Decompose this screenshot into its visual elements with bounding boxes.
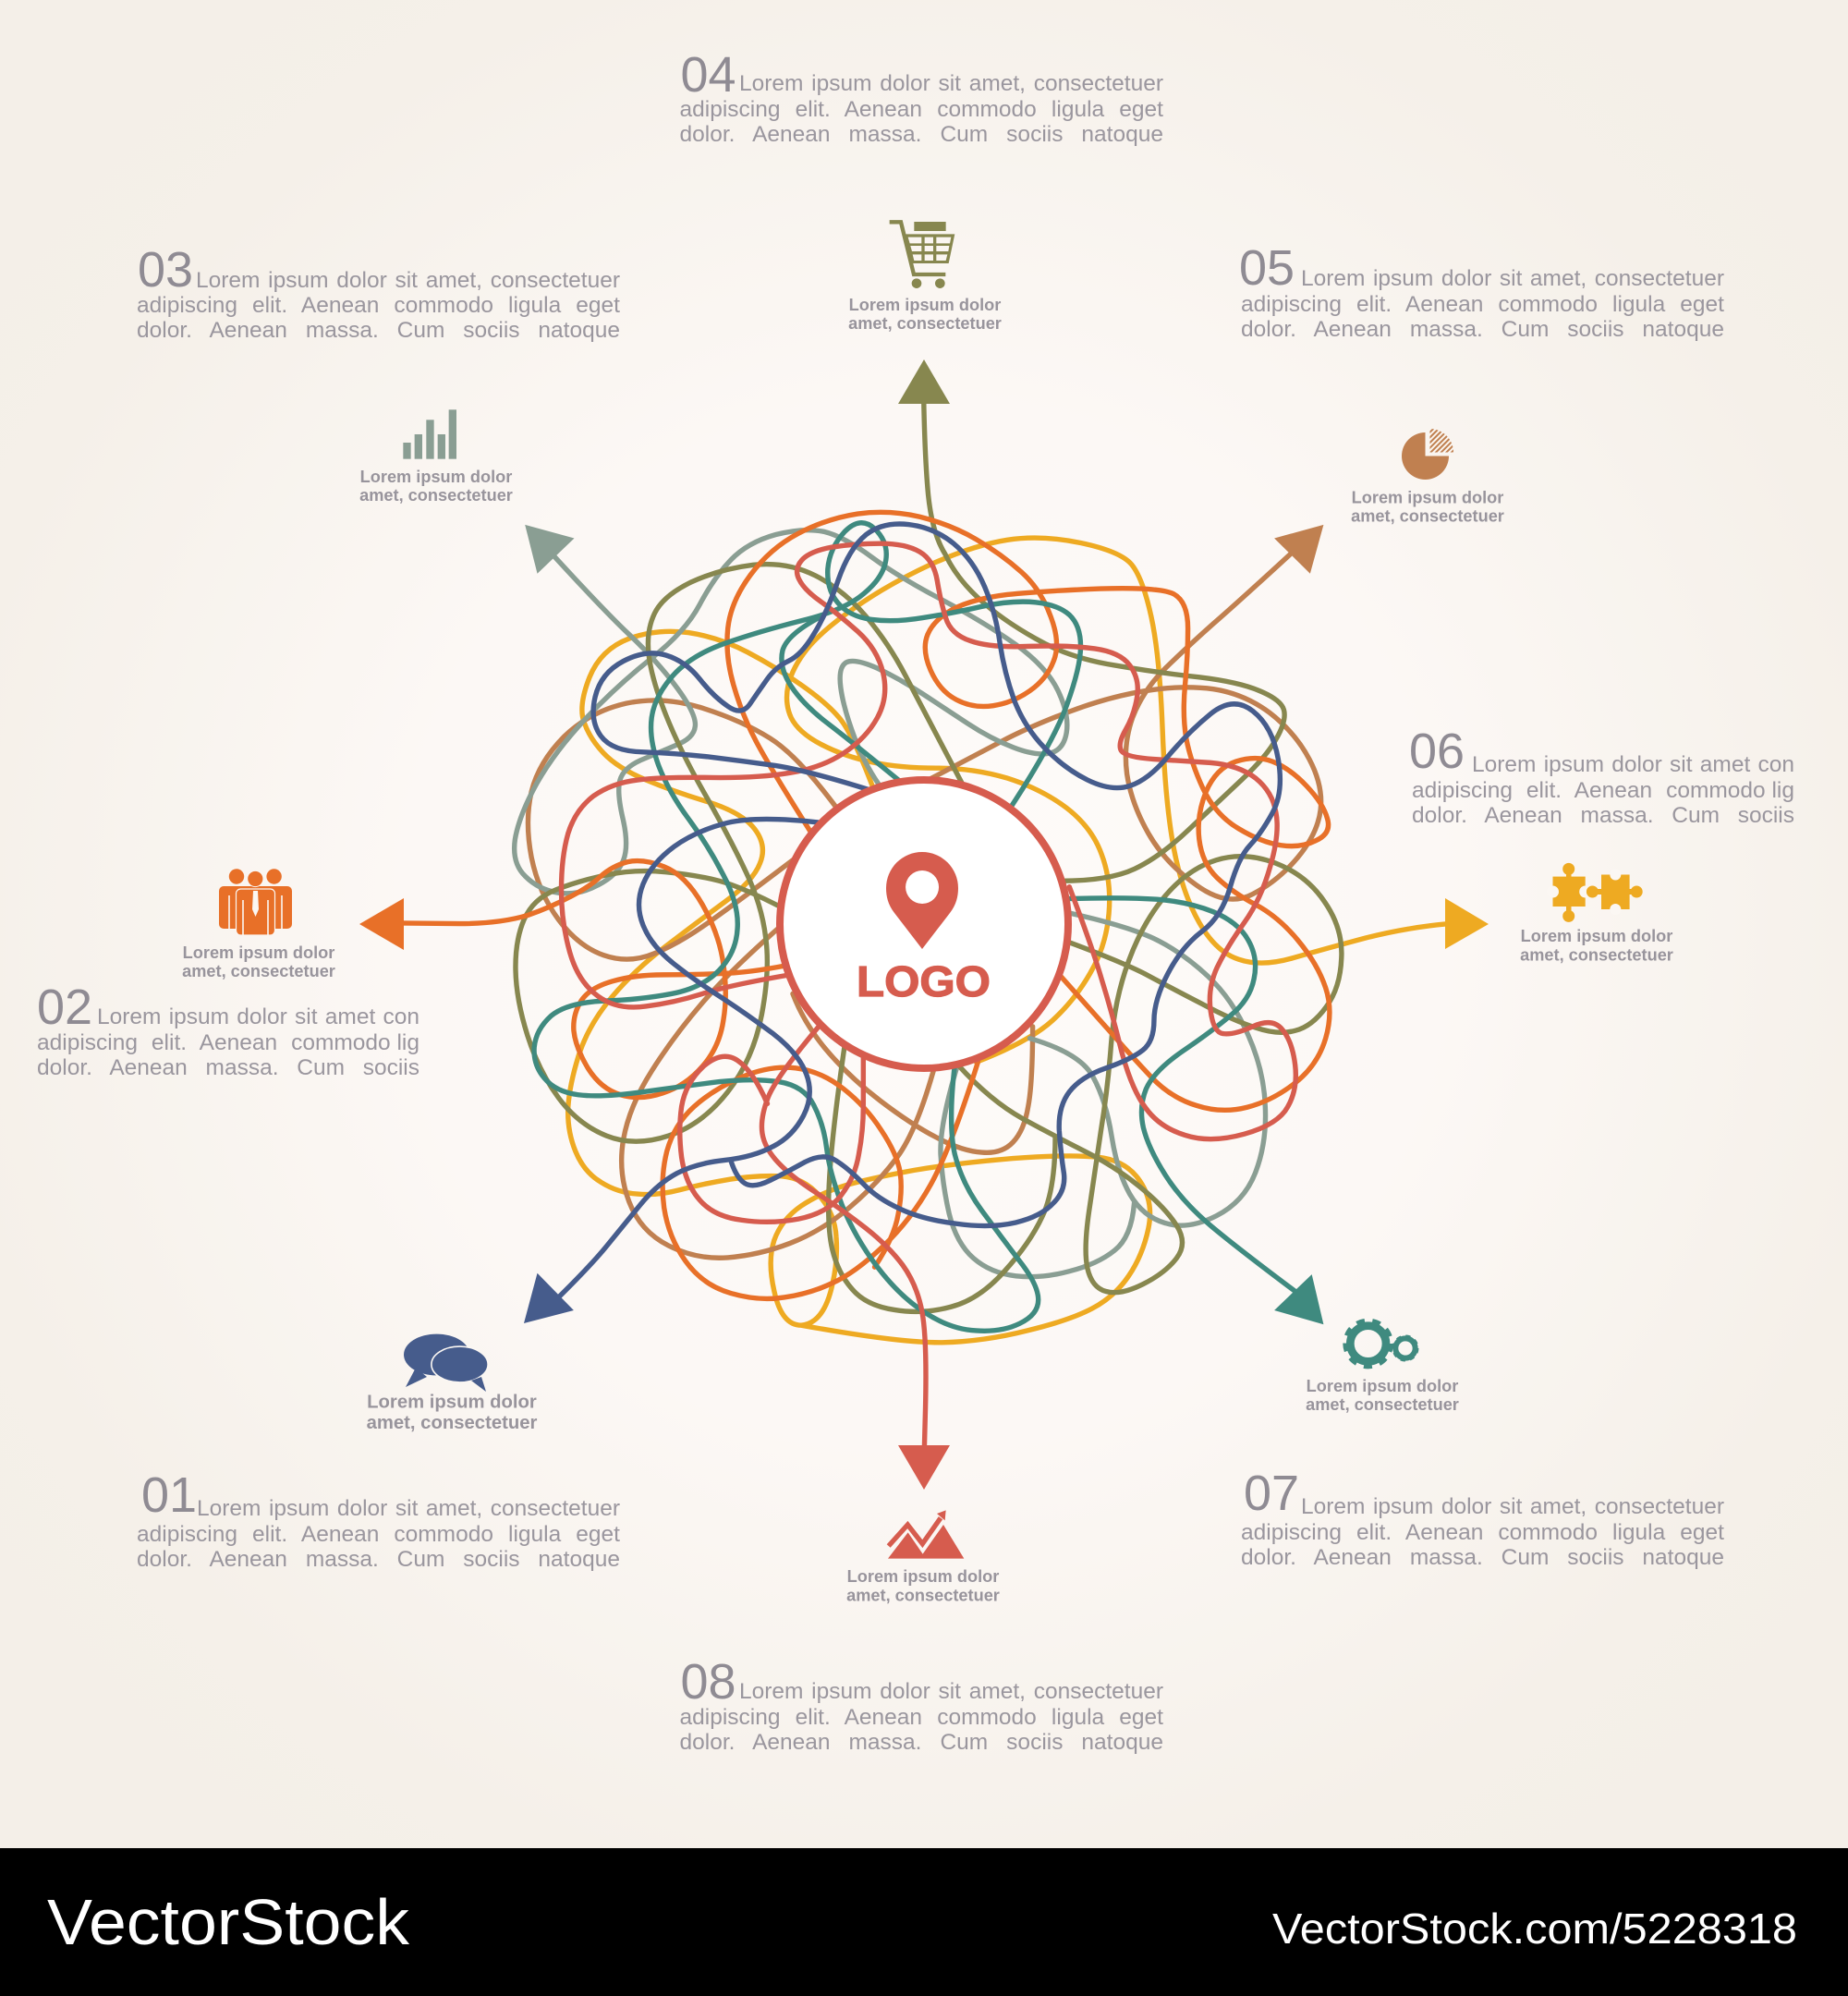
label: 05 icon caption: amet, consectetuer [1351, 506, 1504, 525]
tangled line network [400, 398, 1449, 1451]
text block 07: adipiscing elit. Aenean commodo ligula eget [1241, 1520, 1724, 1545]
line: tan bottom loop [622, 926, 935, 1258]
arrow head: 01 navy [524, 1273, 574, 1323]
line: tan to arrow 05 [929, 540, 1321, 899]
text block 08: dolor. Aenean massa. Cum sociis natoque [680, 1730, 1163, 1755]
text block 01 [137, 1467, 620, 1572]
line: yellow loop [568, 631, 1150, 1343]
arrow head: 04 olive [898, 359, 950, 404]
text block 05: Lorem ipsum dolor sit amet, consectetuer [1301, 266, 1724, 291]
label: 02 icon caption: Lorem ipsum dolor [183, 943, 334, 962]
line: olive left loop [516, 565, 965, 1141]
line: tan left loop [528, 700, 838, 959]
text block 03: dolor. Aenean massa. Cum sociis natoque [137, 318, 620, 343]
icon: gears [1345, 1321, 1417, 1366]
line: orange to arrow 02 [400, 861, 787, 1098]
text block 07: dolor. Aenean massa. Cum sociis natoque [1241, 1545, 1724, 1570]
arrow head: 08 red [898, 1445, 950, 1490]
text block 08: Lorem ipsum dolor sit amet, consectetuer [739, 1679, 1163, 1704]
label: 07 icon caption [1306, 1377, 1459, 1414]
label: 02 icon caption [182, 943, 335, 980]
text block 01: Lorem ipsum dolor sit amet, consectetuer [197, 1496, 620, 1521]
line: red long loop [561, 543, 1295, 1139]
icon: business people [219, 869, 292, 935]
text block 02: Lorem ipsum dolor sit amet con [97, 1004, 419, 1029]
arrow head: 07 teal [1274, 1274, 1323, 1324]
text block 03: adipiscing elit. Aenean commodo ligula eget [137, 293, 620, 318]
label: 08 icon caption [846, 1567, 1000, 1604]
label: 07 icon caption: Lorem ipsum dolor [1307, 1377, 1458, 1395]
line: teal short branch [782, 616, 906, 785]
line: tan lower loop [793, 993, 1033, 1152]
text block 04: 04 [680, 47, 736, 103]
arrow head: 06 yellow [1445, 898, 1489, 949]
line: yellow to arrow 06 [787, 538, 1449, 1062]
text block 06: 06 [1409, 724, 1465, 779]
icon: pie chart [1402, 429, 1453, 480]
label: 01 icon caption: Lorem ipsum dolor [367, 1392, 537, 1412]
label: 05 icon caption [1351, 488, 1504, 525]
text block 02 [37, 980, 419, 1080]
text block 04 [680, 47, 1163, 147]
line: olive to arrow 04 [924, 398, 1284, 881]
line: olive bottom loop [829, 1041, 1055, 1311]
text block 03 [137, 242, 620, 343]
icon: speech bubbles [404, 1334, 488, 1392]
text block 08 [680, 1654, 1163, 1755]
label: 07 icon caption: amet, consectetuer [1306, 1395, 1459, 1414]
label: 04 icon caption [848, 296, 1002, 333]
line: grey-green to arrow 03 [515, 530, 1067, 894]
label: 08 icon caption: Lorem ipsum dolor [847, 1567, 999, 1586]
text block 02: adipiscing elit. Aenean [37, 1030, 277, 1055]
line: orange bottom loop [663, 1062, 978, 1298]
text block 07 [1241, 1466, 1724, 1570]
line: red to arrow 08 [761, 1020, 926, 1451]
label: 06 icon caption: amet, consectetuer [1520, 946, 1673, 965]
text block 06: adipiscing elit. Aenean [1412, 778, 1652, 803]
label: 03 icon caption [359, 468, 513, 505]
text block 03: Lorem ipsum dolor sit amet, consectetuer [196, 268, 620, 293]
label: 08 icon caption: amet, consectetuer [846, 1586, 1000, 1604]
arrow head: 05 tan [1274, 525, 1323, 574]
line: grey-green bottom loop [941, 1065, 1135, 1277]
text block 02: 02 [37, 980, 92, 1035]
text block 06: Lorem ipsum dolor sit amet con [1472, 752, 1794, 777]
line: teal to arrow 07 [1066, 898, 1307, 1300]
logo text: LOGO [857, 957, 991, 1005]
label: 04 icon caption: amet, consectetuer [848, 314, 1002, 333]
icon: puzzle pieces [1547, 863, 1643, 922]
footer brand: VectorStock [47, 1886, 410, 1958]
text block 02: commodo lig [291, 1030, 419, 1055]
text block 07: Lorem ipsum dolor sit amet, consectetuer [1301, 1494, 1724, 1519]
line: red bottom loop [680, 1053, 863, 1222]
label: 03 icon caption: amet, consectetuer [359, 486, 513, 505]
text block 04: adipiscing elit. Aenean commodo ligula eget [680, 97, 1163, 122]
line: navy to arrow 01 [550, 819, 821, 1306]
text block 07: 07 [1244, 1466, 1299, 1521]
text block 08: 08 [680, 1654, 736, 1710]
text block 02: dolor. Aenean massa. Cum sociis [37, 1055, 419, 1080]
label: 04 icon caption: Lorem ipsum dolor [849, 296, 1001, 314]
icon: shopping cart [890, 222, 954, 288]
arrow head: 02 orange [359, 898, 404, 950]
text block 01: dolor. Aenean massa. Cum sociis natoque [137, 1547, 620, 1572]
text block 05 [1239, 240, 1724, 342]
text block 05: adipiscing elit. Aenean commodo ligula eget [1241, 292, 1724, 317]
line: orange top loop [727, 512, 1330, 1110]
arrow head: 03 grey-green [525, 525, 575, 574]
footer bar [0, 1848, 1848, 1996]
text block 06: commodo lig [1666, 778, 1794, 803]
text block 03: 03 [138, 242, 193, 298]
footer url: VectorStock.com/5228318 [1272, 1905, 1797, 1953]
label: 06 icon caption [1520, 927, 1673, 965]
label: 01 icon caption [367, 1392, 538, 1433]
label: 01 icon caption: amet, consectetuer [367, 1413, 538, 1433]
diagonal arrow heads [524, 525, 1323, 1324]
icon: map pin [886, 852, 958, 949]
text block 06 [1409, 724, 1794, 828]
icon: bar chart [403, 409, 456, 459]
label: 02 icon caption: amet, consectetuer [182, 962, 335, 980]
icon: growth mountain [888, 1510, 964, 1559]
center logo circle [780, 780, 1068, 1068]
line: navy long loop [593, 524, 1280, 1226]
text block 05: dolor. Aenean massa. Cum sociis natoque [1241, 317, 1724, 342]
text block 01: 01 [141, 1467, 197, 1523]
label: 06 icon caption: Lorem ipsum dolor [1521, 927, 1672, 945]
text block 04: dolor. Aenean massa. Cum sociis natoque [680, 122, 1163, 147]
line: olive right loop [958, 857, 1342, 1293]
text block 01: adipiscing elit. Aenean commodo ligula eget [137, 1522, 620, 1547]
label: 03 icon caption: Lorem ipsum dolor [360, 468, 512, 486]
text block 05: 05 [1239, 240, 1295, 296]
text block 08: adipiscing elit. Aenean commodo ligula eget [680, 1705, 1163, 1730]
label: 05 icon caption: Lorem ipsum dolor [1352, 488, 1503, 506]
line: teal long loop [534, 523, 1081, 1331]
line: grey-green right loop [1030, 912, 1266, 1225]
text block 04: Lorem ipsum dolor sit amet, consectetuer [739, 71, 1163, 96]
text block 06: dolor. Aenean massa. Cum sociis [1412, 803, 1794, 828]
